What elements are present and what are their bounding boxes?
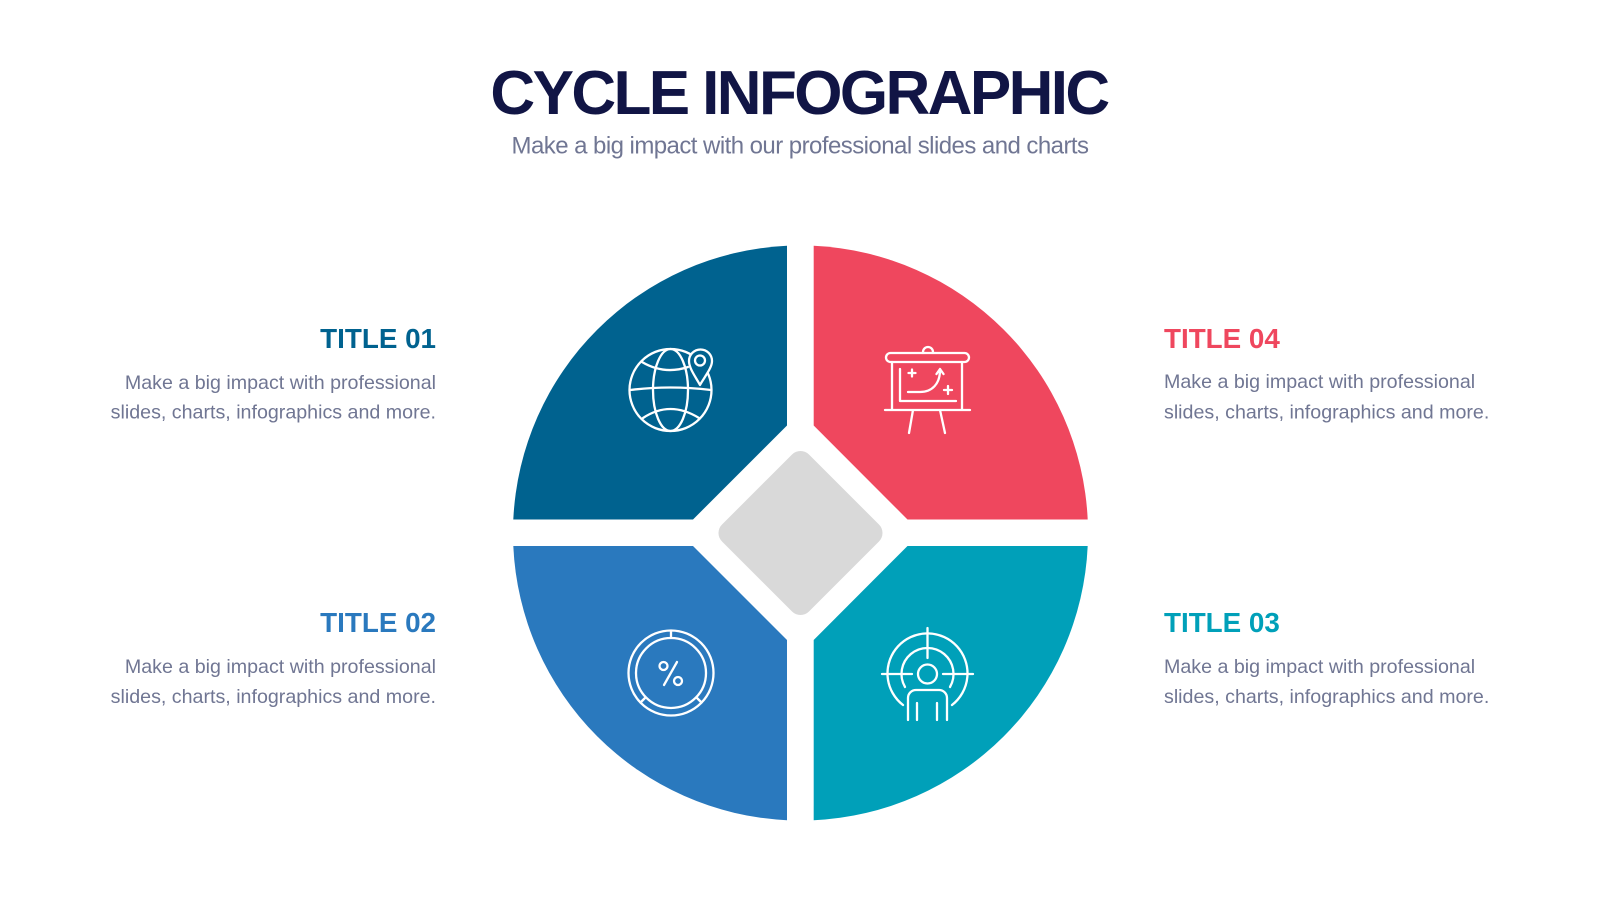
text block: title 01: TITLE 01 <box>320 323 436 354</box>
text block: title 02 <box>111 607 436 708</box>
text block: title 04: Make a big impact with professional <box>1164 371 1475 393</box>
text block: title 01: Make a big impact with professional <box>125 372 436 394</box>
title: CYCLE INFOGRAPHIC <box>490 59 1109 128</box>
text block: title 03: slides, charts, infographics and more. <box>1164 686 1489 708</box>
segment: top right <box>814 246 1088 520</box>
segment: bottom left <box>513 546 787 820</box>
text block: title 03: TITLE 03 <box>1164 607 1280 638</box>
subtitle: Make a big impact with our professional slides and charts <box>512 132 1089 160</box>
text block: title 02: TITLE 02 <box>320 607 436 638</box>
text block: title 02: slides, charts, infographics and more. <box>111 686 436 708</box>
text block: title 04: TITLE 04 <box>1164 323 1280 354</box>
segment: top left <box>513 246 787 520</box>
icon: percent gauge <box>628 630 714 716</box>
text block: title 03 <box>1164 607 1489 708</box>
text block: title 04 <box>1164 323 1489 424</box>
icon: target person <box>882 628 973 720</box>
cycle diagram <box>513 246 1088 820</box>
text block: title 02: Make a big impact with professional <box>125 656 436 678</box>
icon: presentation board <box>885 347 970 433</box>
text block: title 03: Make a big impact with professional <box>1164 656 1475 678</box>
text block: title 01 <box>111 323 436 424</box>
text block: title 04: slides, charts, infographics and more. <box>1164 402 1489 424</box>
segment: bottom right <box>814 546 1088 820</box>
center diamond <box>714 446 887 620</box>
icon: globe with map pin <box>630 349 712 431</box>
text block: title 01: slides, charts, infographics and more. <box>111 402 436 424</box>
